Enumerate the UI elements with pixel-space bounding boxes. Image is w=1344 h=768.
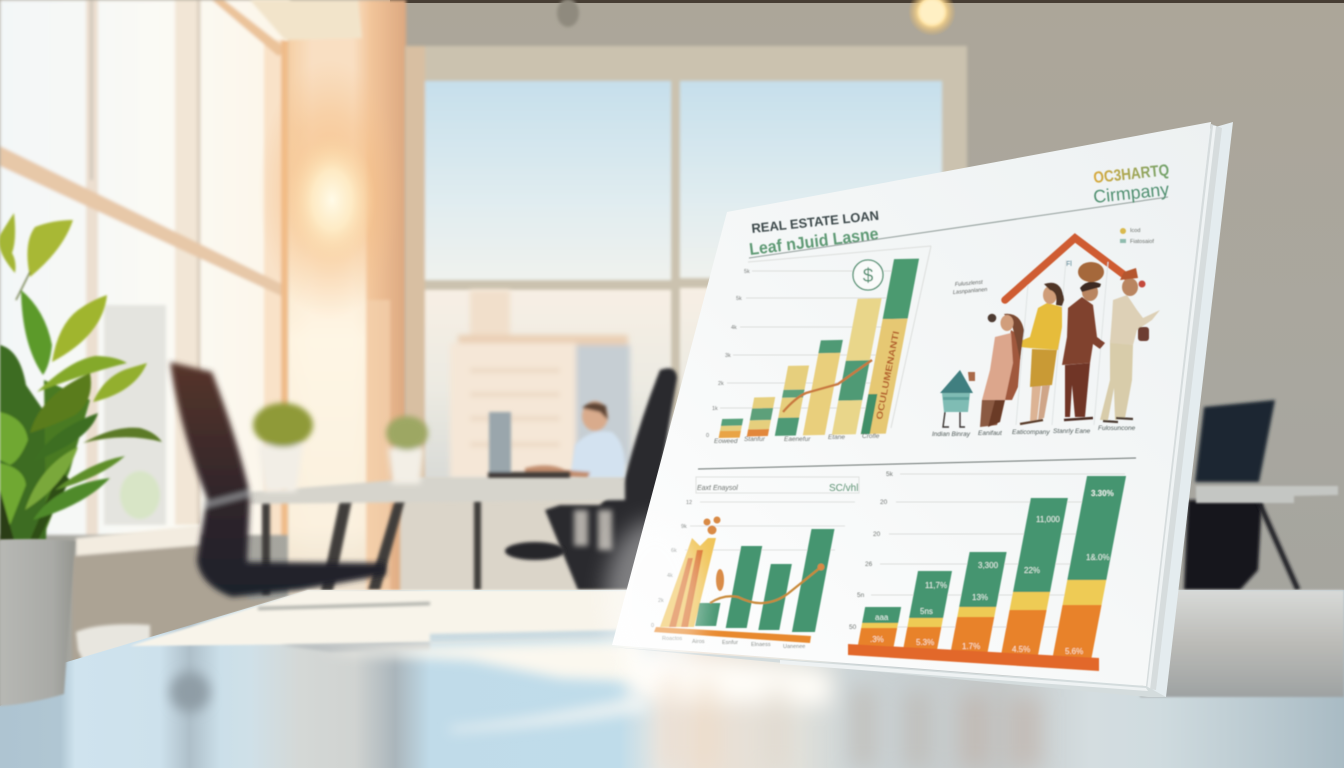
axis labels: 3k [725, 353, 731, 359]
bar values: 11,000 [1036, 515, 1060, 524]
legend: Icod [1130, 228, 1140, 234]
sill and left lower wall [72, 525, 320, 680]
tall orange yellow bars [660, 538, 716, 627]
centre window [405, 46, 967, 496]
axis labels [849, 471, 894, 631]
header rule [749, 197, 1168, 258]
plant leaves [0, 213, 162, 540]
reflection of paper on table [630, 650, 1042, 768]
axis labels: 12 [686, 500, 692, 506]
bar two [747, 397, 775, 436]
cream surface band [130, 590, 660, 646]
bar labels: Airos [692, 639, 705, 645]
bar five [1052, 476, 1126, 660]
section divider [698, 458, 1136, 469]
upper bar chart [706, 246, 931, 445]
bar labels [662, 636, 805, 650]
sun wash over paper corner [605, 520, 705, 680]
coins and pins [704, 516, 824, 591]
chart frame and grid [720, 246, 931, 428]
desk with person [250, 368, 677, 595]
left window with bright frames [0, 0, 290, 535]
header text [748, 162, 1170, 259]
left office chair [170, 362, 386, 597]
bar three [775, 365, 809, 436]
bar labels: Uanenee [783, 644, 805, 650]
bar values: 5ns [920, 607, 933, 616]
legend [1120, 228, 1154, 245]
bar values: 1&.0% [1086, 553, 1110, 562]
laptop [488, 412, 570, 480]
people labels: Eanifaut [978, 430, 1003, 437]
chart header box: Eaxt Enaysol [697, 485, 738, 492]
faint column outlines [1016, 260, 1108, 425]
base strip [848, 644, 1099, 671]
small teal house on legs [940, 370, 975, 427]
bar values: aaa [875, 613, 889, 622]
people labels: Fulosuncone [1098, 425, 1136, 432]
grid lines [862, 474, 1125, 627]
lower left chart [651, 477, 859, 650]
bar values: .3% [870, 635, 884, 644]
axis labels [651, 500, 692, 629]
small plant one [253, 403, 313, 492]
trend line [710, 567, 821, 603]
bar values: 4.5% [1012, 645, 1030, 654]
people labels [932, 425, 1136, 438]
axis labels: 26 [865, 561, 873, 568]
desk legs [262, 500, 481, 595]
bar values [870, 489, 1114, 656]
roof [1005, 238, 1127, 300]
base strip [654, 627, 811, 643]
axis labels: 5k [744, 269, 750, 275]
axis labels: 5k [886, 471, 894, 478]
bar values: 11,7% [925, 581, 947, 590]
paper infographic [605, 122, 1233, 697]
bar values: 5.3% [916, 638, 934, 647]
person four beige [1100, 268, 1160, 422]
person at laptop [525, 401, 625, 478]
shadow streaks [258, 602, 620, 652]
bar labels: Elnaess [751, 642, 771, 648]
people labels: Stanrly Eane [1053, 428, 1091, 435]
axis labels: 2k [718, 381, 724, 387]
bar labels: Esnfur [722, 640, 738, 646]
bars [719, 259, 919, 438]
bar values: 13% [972, 593, 988, 602]
subtitle: Leaf nJuid Lasne [748, 224, 880, 259]
vertical bar lettering: OCULUMENANTI [874, 330, 901, 420]
bar x labels: Crofle [862, 433, 880, 440]
bar six [861, 259, 919, 434]
caption small: Fuluszlenst [955, 280, 983, 288]
axis labels: 4k [731, 325, 737, 331]
trend arrow [783, 360, 872, 412]
grid lines [685, 502, 855, 550]
bar values: 1.7% [962, 642, 980, 651]
people labels: Indian Binray [932, 431, 971, 438]
axis labels: 50 [849, 624, 857, 631]
axis labels: 9k [681, 524, 687, 530]
desk top [250, 478, 625, 504]
legend: Fiatosaiof [1130, 239, 1154, 245]
centre chair [505, 368, 677, 590]
bar values: 3.30% [1091, 489, 1114, 498]
bar three [950, 552, 1007, 654]
small plant two [386, 416, 428, 484]
bar five [832, 298, 882, 435]
caption small [953, 280, 988, 296]
axis labels: 20 [880, 499, 888, 506]
bar four [803, 340, 843, 435]
sun glare [258, 60, 402, 320]
bar values: 22% [1024, 566, 1040, 575]
bar labels: Roactos [662, 636, 682, 642]
front sheet [612, 122, 1211, 686]
axis labels: 0 [651, 623, 654, 629]
lower right stacked bar chart [848, 471, 1126, 671]
chart header box: SC/vhl [829, 483, 858, 494]
axis labels: 0 [706, 433, 709, 439]
company logo: Cirmpany [1092, 179, 1170, 207]
axis labels: 4k [667, 573, 673, 579]
person three brown suit [1062, 262, 1105, 420]
bar x labels: Eoweed [714, 438, 738, 445]
caption small: Lasnpanlanen [953, 287, 988, 296]
bar x labels: Etane [828, 434, 845, 441]
small glass [76, 624, 150, 665]
wall below centre window [400, 478, 670, 596]
bar x labels [714, 433, 880, 445]
small tag: Fl [1066, 261, 1072, 268]
chart header box [696, 477, 859, 494]
green bars [694, 529, 834, 632]
table surface [0, 590, 1344, 768]
people under roof illustration [932, 238, 1160, 438]
people labels: Eaticompany [1012, 429, 1050, 436]
wall column with sun glare [250, 0, 406, 596]
dark reflection patch [170, 672, 210, 712]
blurred city building [450, 290, 630, 478]
title: REAL ESTATE LOAN [751, 208, 880, 236]
company logo [1092, 162, 1170, 207]
stacked bars [855, 476, 1126, 660]
person two yellow [1018, 283, 1064, 424]
bar values: 5.6% [1065, 647, 1083, 656]
person one pink dress [980, 314, 1024, 427]
bar one [719, 419, 743, 438]
plant pot [0, 539, 75, 706]
bar two [903, 571, 952, 652]
white wavy bands [320, 640, 650, 732]
ceiling spotlight dim [557, 0, 579, 27]
back sheets [1148, 122, 1233, 697]
bar values: 3,300 [978, 561, 999, 570]
right chair and table [1184, 400, 1338, 590]
axis labels [706, 269, 750, 439]
axis labels: 5k [736, 296, 742, 302]
bar four [1001, 498, 1068, 657]
axis labels: 5n [857, 592, 865, 599]
bar x labels: Stanfur [744, 436, 766, 443]
paper contents [651, 162, 1170, 671]
bar x labels: Eaenefur [784, 436, 811, 443]
ceiling spotlight [908, 0, 956, 36]
axis labels: 1k [712, 406, 718, 412]
axis labels: 6k [671, 548, 677, 554]
far right table with shadow [1140, 590, 1344, 697]
bar one [857, 607, 901, 650]
dollar icon [853, 260, 883, 290]
company logo: OC3HARTQ [1093, 162, 1170, 187]
axis labels: 20 [873, 531, 881, 538]
axis labels: 2k [658, 598, 664, 604]
large potted plant [0, 213, 162, 706]
dollar icon: $ [863, 266, 874, 287]
